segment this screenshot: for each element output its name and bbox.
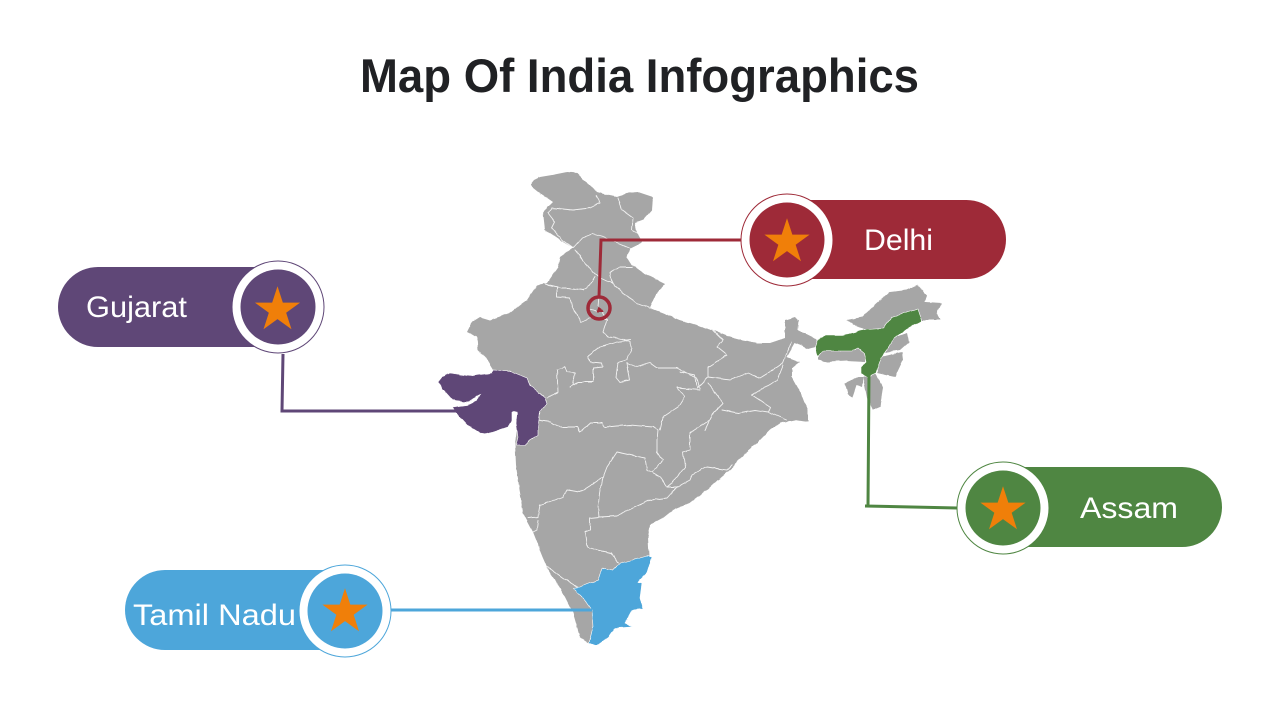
callout: Assam: [865, 373, 1222, 554]
map of India: [438, 172, 942, 646]
title: Map Of India Infographics: [360, 49, 919, 102]
connector: Gujarat: [282, 354, 456, 411]
state boundaries: [528, 195, 792, 587]
badge: Tamil Nadu: [299, 565, 391, 657]
label pill: Delhi: [770, 200, 1006, 279]
label text: Assam: Assam: [1080, 492, 1178, 525]
badge: Delhi: [741, 194, 833, 286]
label text: Gujarat: Gujarat: [86, 291, 188, 324]
callout: Tamil Nadu: [125, 565, 592, 657]
label text: Tamil Nadu: Tamil Nadu: [133, 599, 296, 632]
label pill: Gujarat: [58, 267, 298, 347]
connector: Assam: [865, 373, 957, 508]
state: Delhi: [596, 306, 603, 312]
state: Assam: [815, 309, 922, 377]
callout: Gujarat: [58, 261, 456, 411]
callout: Delhi: [588, 194, 1006, 319]
connector: Delhi: [599, 240, 741, 297]
connector: Tamil Nadu: [391, 608, 592, 612]
north-east states: [818, 285, 942, 410]
badge: Gujarat: [232, 261, 324, 353]
mainland India: [467, 172, 817, 643]
label pill: Tamil Nadu: [125, 570, 365, 650]
label pill: Assam: [986, 467, 1222, 547]
badge: Assam: [957, 462, 1049, 554]
locator ring: Delhi: [588, 297, 610, 319]
state: Gujarat: [438, 370, 547, 445]
label text: Delhi: Delhi: [864, 224, 933, 257]
state: Tamil Nadu: [573, 556, 652, 646]
